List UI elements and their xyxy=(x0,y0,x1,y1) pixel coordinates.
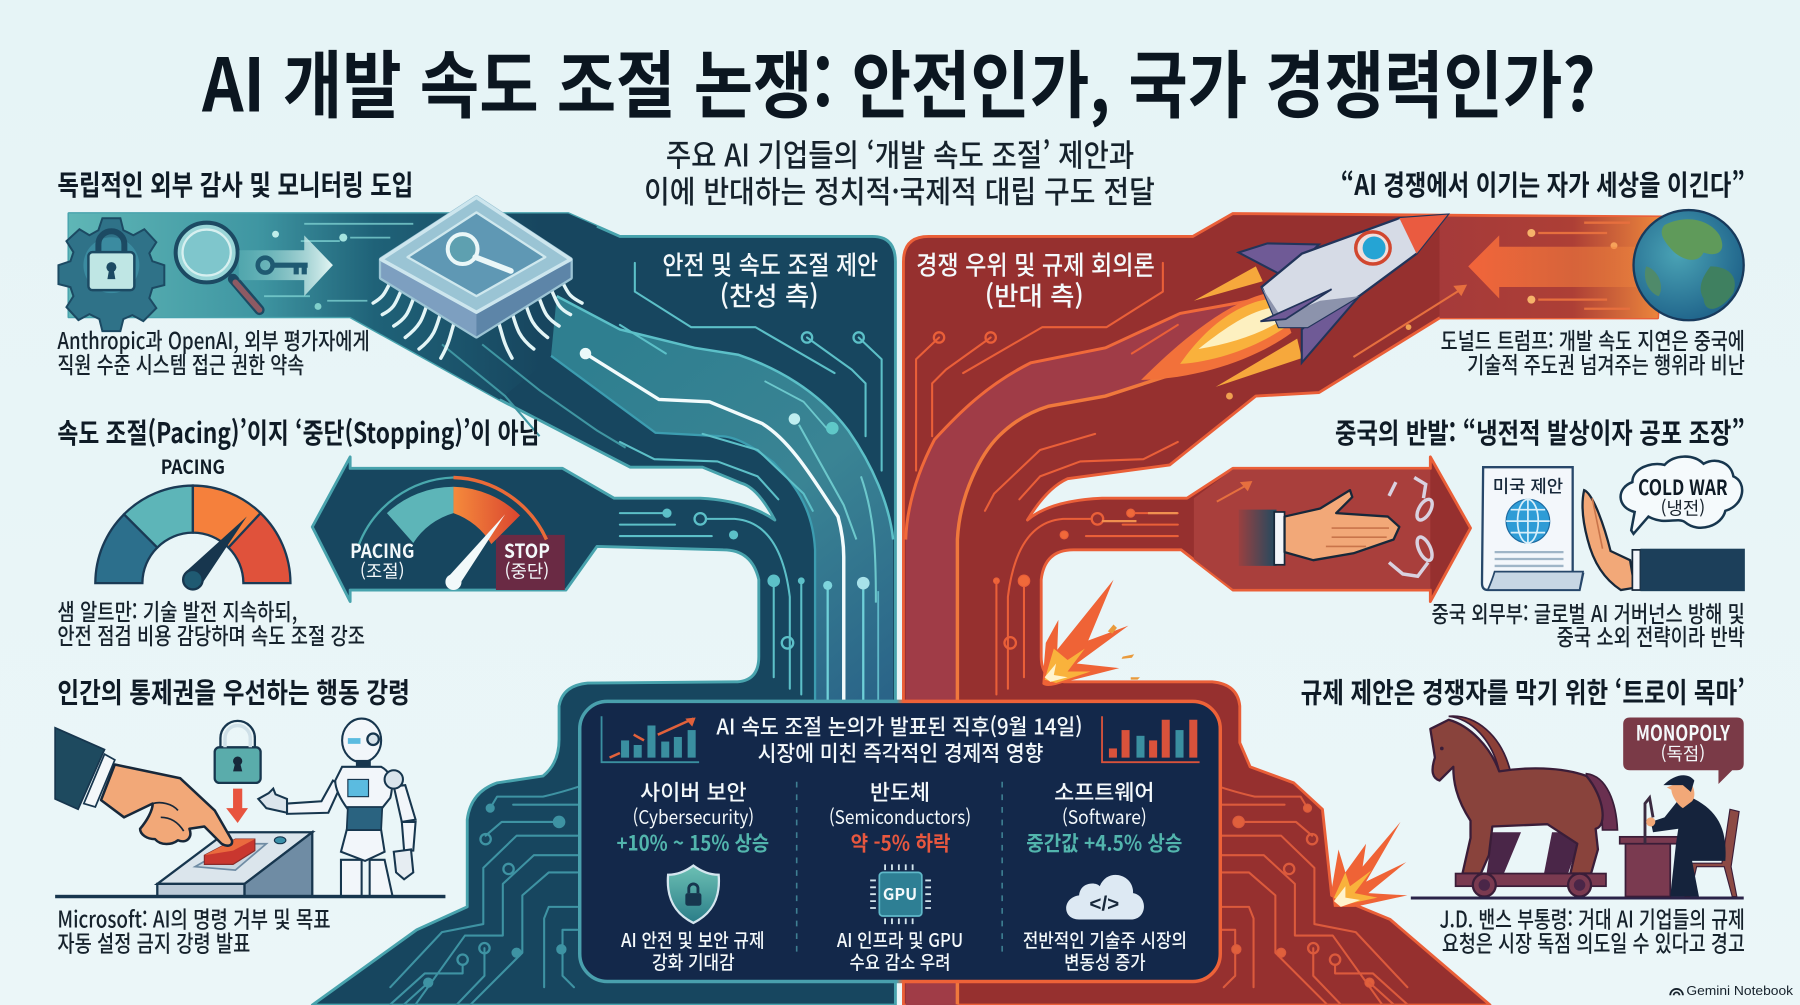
illustration: official at lectern xyxy=(1620,775,1739,897)
arrow: orange pushback from globe xyxy=(1468,235,1642,298)
column: semiconductors: (Semiconductors) xyxy=(829,803,971,830)
heading: panel title xyxy=(716,711,1083,768)
column: software: 중간값 +4.5% 상승 xyxy=(1026,827,1182,857)
text: audit description: Anthropic과 OpenAI, 외부 평가자에게 xyxy=(57,322,370,356)
column: software: 변동성 증가 xyxy=(1064,948,1146,975)
text: trump description: 기술적 주도권 넘겨주는 행위라 비난 xyxy=(1467,346,1745,380)
column: semiconductors: 반도체 xyxy=(870,776,930,807)
icon: glass microchip xyxy=(373,197,582,358)
gauge: pacing xyxy=(95,451,290,589)
illustration: stop hand gesture xyxy=(1582,490,1745,591)
icon: rocket with flame xyxy=(1141,215,1448,387)
title: AI 개발 속도 조절 논쟁: 안전인가, 국가 경쟁력인가? xyxy=(201,27,1596,133)
flow band: red xyxy=(906,301,1274,1005)
column: software xyxy=(1023,776,1187,975)
gauge: pacing: PACING xyxy=(161,451,225,480)
column: semiconductors: AI 인프라 및 GPU xyxy=(837,926,963,953)
callout: monopoly speech bubble: (독점) xyxy=(1661,740,1705,766)
text: microsoft description: Microsoft: AI의 명령 거부 및 목표 xyxy=(57,901,331,935)
flow band: teal xyxy=(551,296,893,700)
callout: cold war cloud: (냉전) xyxy=(1661,494,1705,520)
text: altman description: 안전 점검 비용 감당하며 속도 조절 강조 xyxy=(57,617,365,651)
heading: pacing not stopping: 속도 조절(Pacing)’이지 ‘중단(Stopping)’이 아님 xyxy=(57,411,540,452)
icon: US proposal document xyxy=(1482,467,1583,590)
text: audit description xyxy=(57,322,370,380)
column: cybersecurity xyxy=(616,776,769,975)
heading: opposition side label: 경쟁 우위 및 규제 회의론 xyxy=(916,243,1155,282)
icon: explosion upper xyxy=(1042,580,1140,686)
heading: human control: 인간의 통제권을 우선하는 행동 강령 xyxy=(57,671,410,712)
icon: code cloud xyxy=(1066,875,1144,919)
heading: panel title: AI 속도 조절 논의가 발표된 직후(9월 14일) xyxy=(716,711,1083,742)
column: software: 전반적인 기술주 시장의 xyxy=(1023,926,1187,953)
heading: panel title: 시장에 미친 즉각적인 경제적 영향 xyxy=(758,737,1043,768)
subtitle xyxy=(644,130,1155,212)
illustration: hand pressing stop button with robot xyxy=(55,719,445,898)
panel: competition side red circuit xyxy=(903,214,1663,1005)
column: cybersecurity: +10% ~ 15% 상승 xyxy=(616,827,769,857)
icon: magnifying glass xyxy=(176,223,259,310)
text: vance description xyxy=(1440,901,1745,959)
callout: monopoly speech bubble: MONOPOLY xyxy=(1636,716,1731,746)
icon: US proposal document: 미국 제안 xyxy=(1493,472,1563,498)
column: software: 소프트웨어 xyxy=(1054,776,1154,807)
callout: monopoly speech bubble xyxy=(1623,716,1744,784)
text: audit description: 직원 수준 시스템 접근 권한 약속 xyxy=(57,346,304,380)
heading: external audit: 독립적인 외부 감사 및 모니터링 도입 xyxy=(57,163,413,204)
arrow: pacing vs stop gauge: (조절) xyxy=(360,557,405,583)
text: trump description xyxy=(1441,322,1745,380)
callout: cold war cloud: COLD WAR xyxy=(1638,471,1728,501)
arrow: key access xyxy=(239,235,333,296)
column: cybersecurity: 사이버 보안 xyxy=(640,776,747,807)
panel: safety side teal circuit xyxy=(69,214,895,1005)
column: semiconductors xyxy=(829,776,971,975)
text: china foreign ministry description xyxy=(1431,595,1745,652)
icon: explosion lower xyxy=(1332,822,1407,907)
chart: mixed bars xyxy=(1102,716,1200,762)
subtitle: 이에 반대하는 정치적·국제적 대립 구도 전달 xyxy=(644,167,1155,212)
text: china foreign ministry description: 중국 소외 전략이라 반박 xyxy=(1557,618,1745,652)
column: semiconductors: 수요 감소 우려 xyxy=(849,948,951,975)
icon: earth globe xyxy=(1634,210,1744,320)
icon: GPU chip: GPU xyxy=(883,881,917,905)
icon: code cloud: </> xyxy=(1089,892,1119,915)
callout: cold war cloud xyxy=(1621,457,1742,534)
column: software: (Software) xyxy=(1062,803,1147,830)
text: microsoft description: 자동 설정 금지 강령 발표 xyxy=(57,925,250,959)
illustration: hand breaking chains xyxy=(1239,478,1435,576)
text: microsoft description xyxy=(57,901,331,959)
column: cybersecurity: (Cybersecurity) xyxy=(633,803,754,830)
arrow: pacing vs stop gauge: STOP xyxy=(504,535,550,564)
icon: shield xyxy=(668,866,719,923)
text: altman description xyxy=(57,593,365,651)
subtitle: 주요 AI 기업들의 ‘개발 속도 조절’ 제안과 xyxy=(666,130,1134,175)
arrow: pacing vs stop gauge: (중단) xyxy=(505,557,549,583)
text: altman description: 샘 알트만: 기술 발전 지속하되, xyxy=(57,593,297,627)
watermark: Gemini Notebook: Gemini Notebook xyxy=(1686,983,1794,998)
column: semiconductors: 약 -5% 하락 xyxy=(851,827,951,857)
illustration: trojan horse on wheels xyxy=(1411,716,1744,900)
column: cybersecurity: AI 안전 및 보안 규제 xyxy=(621,926,765,953)
heading: safety side label xyxy=(662,243,878,313)
icon: GPU chip xyxy=(870,864,931,924)
heading: opposition side label: (반대 측) xyxy=(985,274,1084,313)
column: cybersecurity: 강화 기대감 xyxy=(652,948,735,975)
icon: gear with lock xyxy=(58,218,164,331)
panel: economic impact summary xyxy=(580,701,1220,981)
arrow: pacing vs stop gauge: PACING xyxy=(350,535,414,564)
heading: safety side label: (찬성 측) xyxy=(720,274,819,313)
heading: safety side label: 안전 및 속도 조절 제안 xyxy=(662,243,878,282)
arrow: pacing vs stop gauge xyxy=(350,478,565,590)
chart: rising bars xyxy=(602,716,699,762)
heading: opposition side label xyxy=(916,243,1155,313)
